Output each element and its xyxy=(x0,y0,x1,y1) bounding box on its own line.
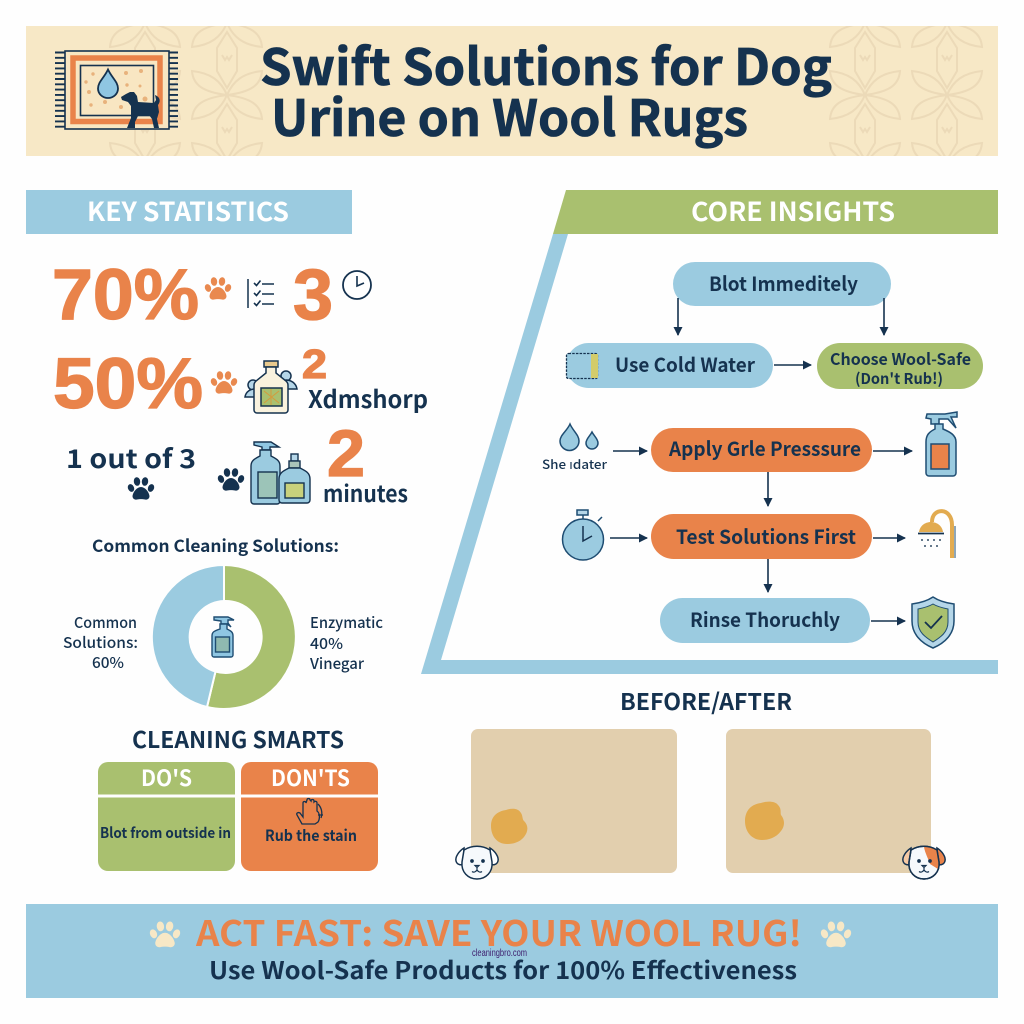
icon: rubbing hand xyxy=(297,798,323,824)
stat: 1 out of 3: 1 out of 3 xyxy=(66,439,196,476)
icon: white dog face xyxy=(456,846,498,879)
before rug xyxy=(471,729,677,873)
blue frame xyxy=(421,234,998,674)
stat: 3: 3 xyxy=(293,256,333,335)
call to action: ACT FAST: SAVE YOUR WOOL RUG! xyxy=(195,906,802,957)
heading: core insights: CORE INSIGHTS xyxy=(691,192,895,229)
card: do's: DO'S xyxy=(141,761,192,793)
label: Xdmshorp: Xdmshorp xyxy=(308,380,428,415)
icon: navy paw xyxy=(127,477,155,500)
flow node: blot immediately xyxy=(673,262,891,306)
icon: water drops xyxy=(560,424,598,451)
flow node: rinse thoroughly: Rinse Thoruchly xyxy=(690,604,840,633)
title: Swift Solutions for Dog xyxy=(260,28,832,100)
donut label: common solutions: Solutions: xyxy=(63,632,138,653)
stat: big 2: 2 xyxy=(327,416,365,490)
icon: stopwatch xyxy=(562,510,604,560)
flow node: apply pressure xyxy=(651,428,872,472)
label: minutes: minutes xyxy=(323,475,408,509)
arrow: pressure to spray xyxy=(873,450,912,452)
arrow: rinse to shield xyxy=(871,620,905,622)
icon: spray bottle orange xyxy=(926,412,957,476)
flow node: choose wool-safe: Choose Wool-Safe xyxy=(830,346,971,370)
icon: clock xyxy=(343,271,371,299)
heading: core insights xyxy=(553,190,998,234)
heading: common cleaning solutions: Common Cleaning Solutions: xyxy=(92,532,339,557)
flow node: apply pressure: Apply Grle Presssure xyxy=(668,433,861,462)
heading: key statistics xyxy=(26,190,352,234)
card: don'ts: Rub the stain xyxy=(265,824,357,846)
icon: orange paw xyxy=(210,371,238,394)
icon: shower head xyxy=(918,511,955,558)
donut label: enzymatic: Enzymatic xyxy=(310,612,383,633)
icon: sponge xyxy=(566,354,598,378)
header banner xyxy=(26,26,998,156)
flow node: test solutions first: Test Solutions First xyxy=(676,521,856,550)
stat: 50%: 50% xyxy=(53,345,203,424)
icon: cleaner bottle xyxy=(245,361,297,413)
flow node: blot immediately: Blot Immeditely xyxy=(709,268,858,297)
icon: cream paw left xyxy=(148,921,182,947)
icon: spray bottle in donut xyxy=(212,617,234,657)
title: Urine on Wool Rugs xyxy=(271,79,748,151)
arrow: test to rinse xyxy=(767,559,769,592)
arrow: blot to cold water xyxy=(677,298,679,335)
icon: cream paw right xyxy=(819,921,853,947)
arrow: pressure to test xyxy=(767,472,769,506)
panel: key statistics xyxy=(26,190,428,509)
arrow: blot to wool-safe xyxy=(883,298,885,335)
icon: spray bottles xyxy=(251,442,310,504)
arrow: stopwatch to test xyxy=(610,537,647,539)
flow node: choose wool-safe xyxy=(817,343,983,389)
donut label: common solutions: 60% xyxy=(92,652,124,673)
footer subtitle: Use Wool-Safe Products for 100% Effectiveness xyxy=(209,951,797,986)
footer banner xyxy=(26,904,998,998)
flow node: use cold water xyxy=(566,343,773,388)
flow node: use cold water: Use Cold Water xyxy=(615,349,755,378)
card: don'ts xyxy=(241,761,378,871)
watermark: cleaningbro.com xyxy=(472,948,527,959)
stat: 70%: 70% xyxy=(52,256,199,335)
card: don'ts: DON'TS xyxy=(271,761,350,793)
donut chart xyxy=(152,565,296,709)
icon: navy paw xyxy=(217,468,245,491)
donut label: enzymatic: Vinegar xyxy=(309,653,365,674)
donut label: enzymatic: 40% xyxy=(310,633,343,654)
flow node: test solutions first xyxy=(651,514,872,559)
flow node: rinse thoroughly xyxy=(660,598,870,643)
icon: rug with water drop and dog xyxy=(55,51,178,129)
title xyxy=(260,28,832,151)
donut label: enzymatic xyxy=(309,612,383,674)
icon: orange patch dog face xyxy=(903,846,945,879)
panel: cleaning smarts xyxy=(98,721,378,871)
heading: before/after: BEFORE/AFTER xyxy=(620,683,792,717)
card: do's xyxy=(98,761,235,871)
flow node: choose wool-safe: (Don't Rub!) xyxy=(855,368,943,389)
panel: core insights xyxy=(421,190,998,674)
after rug xyxy=(726,729,931,873)
heading: key statistics: KEY STATISTICS xyxy=(87,192,289,229)
donut label: common solutions xyxy=(63,612,138,673)
donut label: common solutions: Common xyxy=(74,612,137,633)
panel: before and after xyxy=(456,683,945,879)
arrow: drops to pressure xyxy=(613,450,647,452)
stat: small 2: 2 xyxy=(302,341,327,387)
heading: cleaning smarts: CLEANING SMARTS xyxy=(132,721,344,755)
panel: common cleaning solutions donut xyxy=(63,532,383,709)
icon: shield xyxy=(912,597,954,648)
icon: checklist xyxy=(248,279,274,308)
arrow: cold water to wool-safe xyxy=(774,364,811,366)
card: do's: Blot from outside in xyxy=(100,822,231,843)
label: she idater: She ıdater xyxy=(542,454,608,473)
arrow: test to shower xyxy=(873,537,905,539)
icon: orange paw xyxy=(204,277,232,300)
